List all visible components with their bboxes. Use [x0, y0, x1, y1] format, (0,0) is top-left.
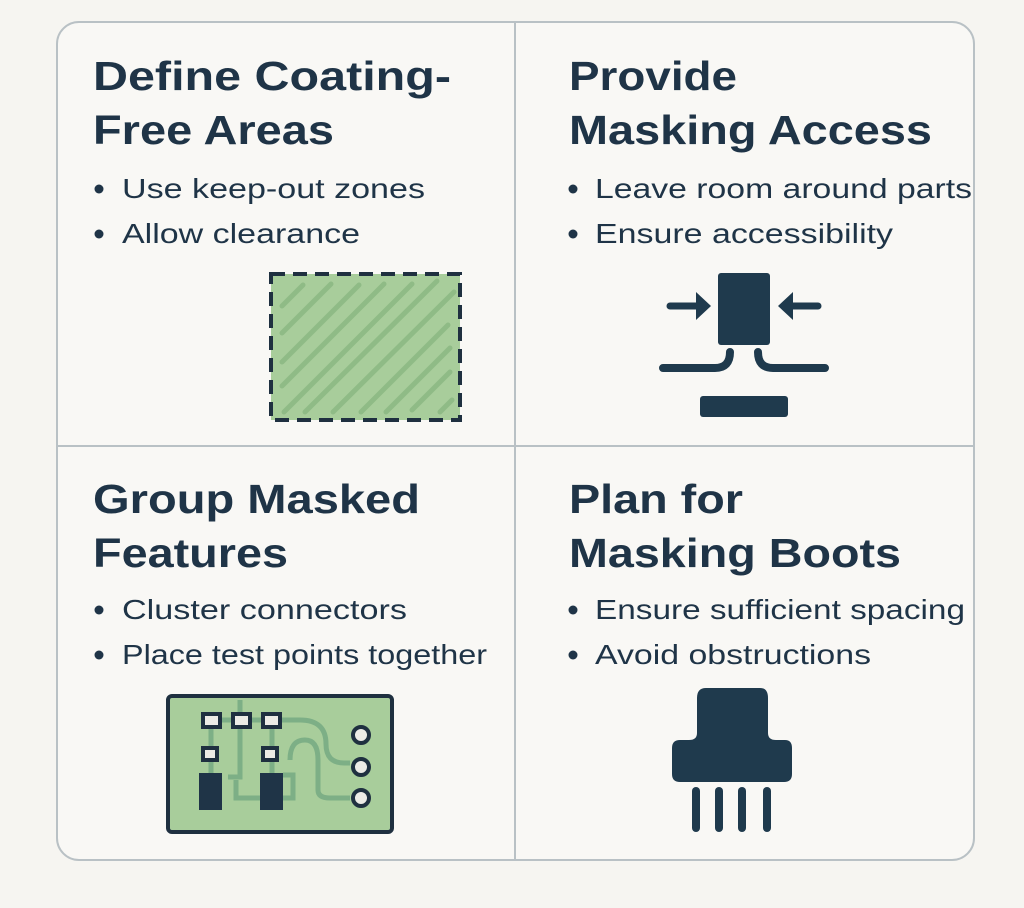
bullets: cluster: Cluster connectors	[122, 594, 407, 625]
bullets: cluster	[94, 594, 487, 670]
bullets: spacing	[568, 594, 965, 670]
bullets: cluster: Place test points together	[122, 639, 487, 670]
bullets: access: Ensure accessibility	[595, 218, 893, 249]
bullets: spacing: Avoid obstructions	[595, 639, 871, 670]
heading: provide masking access: Masking Access	[569, 107, 932, 153]
panel: define coating-free areas	[93, 53, 460, 420]
panel: group masked features	[93, 476, 487, 832]
bullets: access: Leave room around parts	[595, 173, 972, 204]
icon: pcb	[168, 696, 392, 832]
icon: component with access arrows	[663, 273, 825, 417]
heading: define coating-free areas	[93, 53, 451, 153]
heading: plan for masking boots: Masking Boots	[569, 530, 901, 576]
icon: hatched keep-out zone	[271, 274, 460, 420]
heading: define coating-free areas: Free Areas	[93, 107, 334, 153]
bullets: access	[568, 173, 972, 249]
heading: group masked features: Features	[93, 530, 288, 576]
heading: provide masking access	[569, 53, 932, 153]
bullets: keep-out: Allow clearance	[122, 218, 360, 249]
icon: masking boot	[672, 688, 792, 828]
bullets: spacing: Ensure sufficient spacing	[595, 594, 965, 625]
heading: define coating-free areas: Define Coating-	[93, 53, 451, 99]
panel: provide masking access	[568, 53, 972, 417]
bullets: keep-out: Use keep-out zones	[122, 173, 425, 204]
heading: plan for masking boots: Plan for	[569, 476, 743, 522]
panel: plan for masking boots	[568, 476, 965, 828]
heading: group masked features: Group Masked	[93, 476, 420, 522]
heading: provide masking access: Provide	[569, 53, 737, 99]
bullets: keep-out	[94, 173, 425, 249]
heading: group masked features	[93, 476, 420, 576]
heading: plan for masking boots	[569, 476, 901, 576]
